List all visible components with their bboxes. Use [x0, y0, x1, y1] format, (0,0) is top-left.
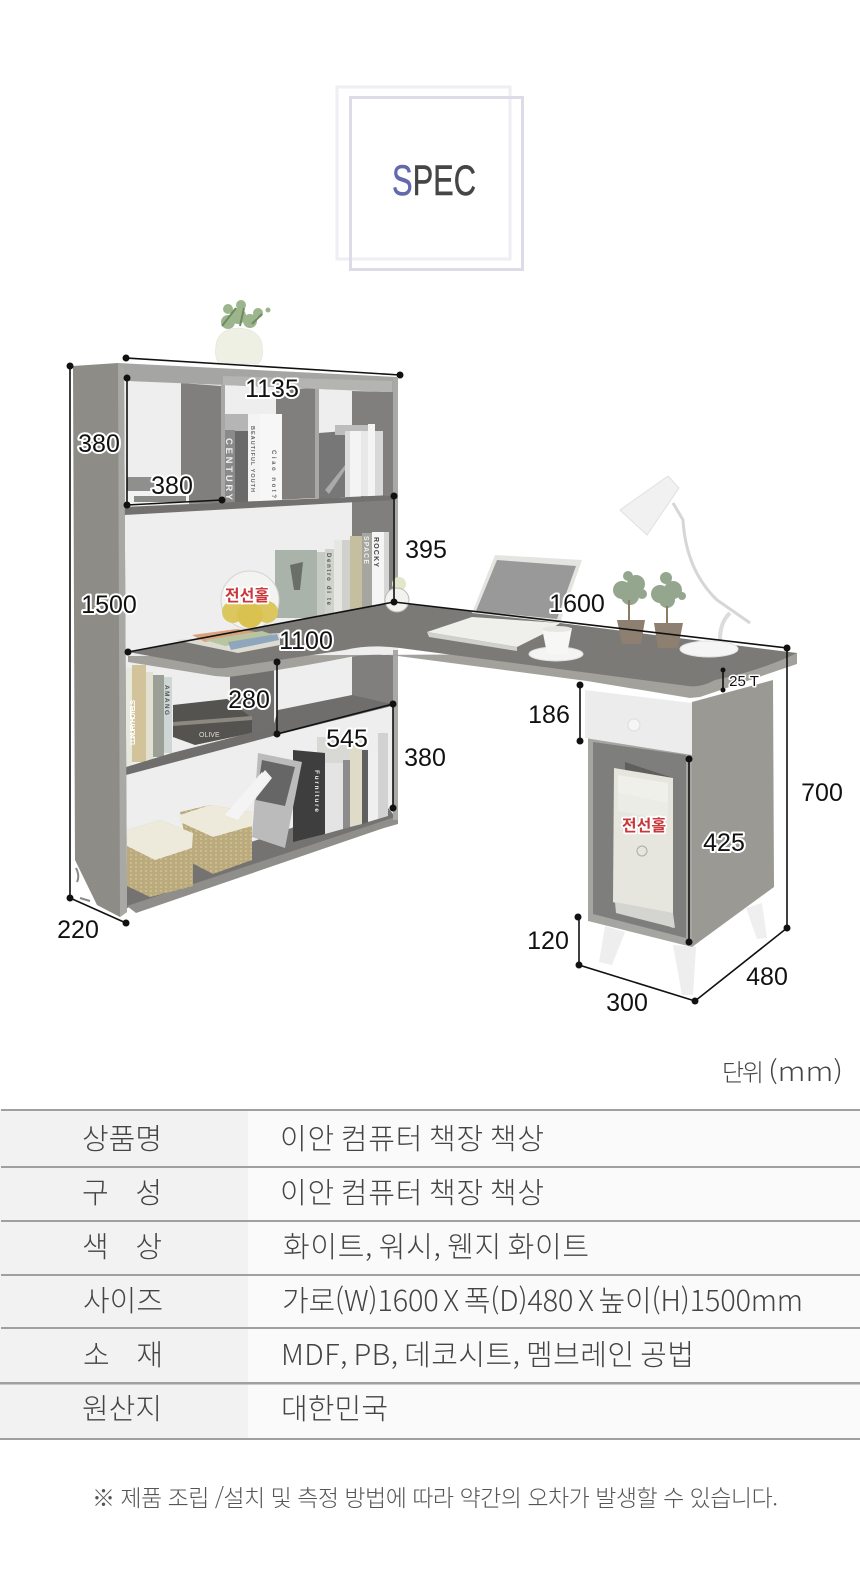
top shelf books — [127, 414, 383, 504]
illustration: L-shaped desk with bookcase — [57, 300, 843, 1017]
pedestal with drawer — [585, 680, 774, 995]
row: colour — [82, 1224, 589, 1266]
dimension labels: 1100 — [279, 627, 333, 655]
notebook and books — [175, 629, 280, 653]
dimension labels: 380 — [151, 472, 193, 500]
PC tower — [613, 762, 675, 928]
row: origin: 원산지 — [82, 1386, 162, 1428]
row: colour: 화이트, 워시, 웬지 화이트 — [283, 1224, 589, 1266]
unit note — [722, 1052, 843, 1089]
dimension labels: 25 T — [729, 673, 759, 690]
dimension labels: 1600 — [549, 590, 605, 618]
plant on top — [216, 300, 270, 364]
dimension labels: 1135 — [245, 375, 299, 403]
laptop — [427, 555, 582, 651]
lower shelf books: OLIVE — [199, 732, 220, 739]
dimension labels: 220 — [57, 916, 99, 944]
drawer — [585, 690, 692, 755]
potted plants — [613, 571, 686, 648]
title: SPEC frame: SPEC — [392, 157, 476, 205]
dimension labels: 700 — [801, 779, 843, 807]
baskets — [127, 772, 268, 897]
middle shelf books: SPACE — [362, 536, 369, 564]
lower shelf books — [126, 665, 252, 766]
dimension labels — [57, 375, 843, 1017]
row: product name: 이안 컴퓨터 책장 책상 — [280, 1116, 544, 1158]
glass bowl with lemons — [221, 571, 279, 629]
lower shelf books: AMANG — [163, 685, 170, 715]
dimension labels: 300 — [606, 989, 648, 1017]
top shelf books: BEAUTIFUL YOUTH — [249, 426, 255, 492]
dimension labels: 425 — [703, 829, 745, 857]
dimension labels: 1500 — [81, 591, 137, 619]
row: material: 소 재 — [83, 1332, 163, 1374]
top shelf books: CENTURY — [223, 438, 234, 501]
dimension lines — [66, 354, 790, 1004]
lower shelf books: LUXURY HOTELS — [130, 700, 137, 745]
cup and saucer — [529, 626, 583, 661]
row: origin — [82, 1386, 388, 1428]
dimension labels: 전선홀 — [225, 587, 269, 605]
dimension labels: 480 — [746, 963, 788, 991]
row: size: 사이즈 — [83, 1278, 163, 1320]
row: material — [83, 1332, 694, 1374]
desk top — [128, 602, 797, 698]
row: size: 가로(W)1600 X 폭(D)480 X 높이(H)1500mm — [282, 1278, 803, 1320]
row: origin: 대한민국 — [281, 1386, 388, 1428]
side panel — [73, 363, 127, 917]
desk lamp — [620, 476, 750, 657]
row: material: MDF, PB, 데코시트, 멤브레인 공법 — [281, 1332, 694, 1374]
middle shelf books: ROCKY — [372, 537, 379, 567]
alarm clock — [385, 577, 409, 612]
dimension labels: 395 — [405, 536, 447, 564]
row: composition: 이안 컴퓨터 책장 책상 — [280, 1170, 544, 1212]
dimension labels: 380 — [78, 430, 120, 458]
footnote: ※ 제품 조립 /설치 및 측정 방법에 따라 약간의 오차가 발생할 수 있습니다. — [92, 1479, 778, 1513]
unit note: 단위 — [722, 1053, 764, 1088]
unit note: (mm) — [768, 1052, 843, 1089]
row: composition: 구 성 — [82, 1170, 162, 1212]
bottom shelf books — [228, 733, 388, 848]
dimension labels: 전선홀 — [622, 817, 666, 835]
dimension labels: 380 — [404, 744, 446, 772]
dimension labels: 186 — [528, 701, 570, 729]
title: SPEC frame — [337, 87, 522, 270]
row: product name: 상품명 — [82, 1116, 162, 1158]
middle shelf books: Dentro di te — [325, 553, 331, 606]
spec table — [0, 1109, 860, 1440]
row: product name — [82, 1116, 544, 1158]
row: colour: 색 상 — [82, 1224, 162, 1266]
dimension labels: 545 — [326, 725, 368, 753]
row: composition — [82, 1170, 544, 1212]
desk items — [175, 476, 750, 661]
legs — [599, 903, 767, 995]
middle shelf books — [275, 532, 389, 618]
bottom shelf books: Furniture — [313, 770, 320, 812]
top shelf books: Ciao not? — [270, 450, 276, 498]
dimension labels: 120 — [527, 927, 569, 955]
dimension labels: 280 — [228, 686, 270, 714]
bookcase — [73, 363, 398, 917]
